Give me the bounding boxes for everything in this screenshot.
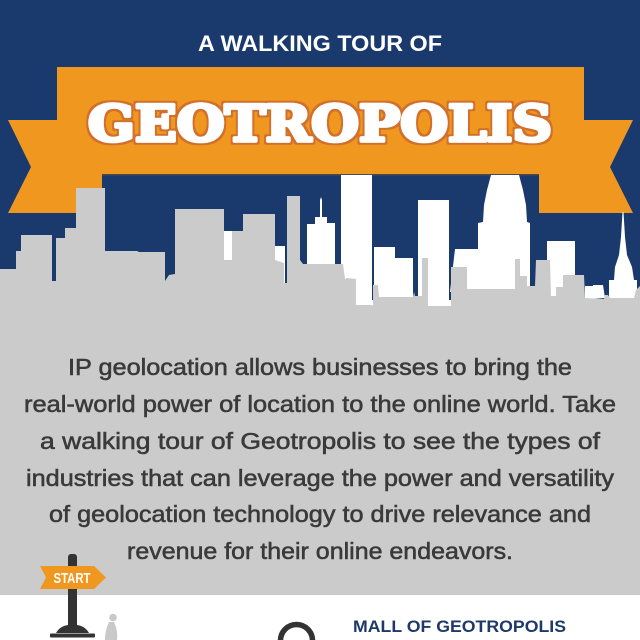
intro paragraph	[24, 354, 616, 564]
intro paragraph: of geolocation technology to drive relevance and	[49, 501, 591, 527]
title: a walking tour of: A WALKING TOUR OF	[198, 31, 442, 56]
icon: mall ring	[280, 624, 312, 640]
icon: start signpost	[40, 554, 106, 638]
icon: walking figure	[105, 614, 117, 640]
background: navy sky	[0, 0, 640, 300]
intro paragraph: real-world power of location to the online world. Take	[24, 391, 616, 417]
sign label: start: START	[54, 570, 90, 587]
intro paragraph: industries that can leverage the power and versatility	[26, 465, 615, 491]
intro paragraph: revenue for their online endeavors.	[127, 538, 513, 564]
intro paragraph: a walking tour of Geotropolis to see the types of	[40, 428, 601, 454]
heading: mall of geotropolis: MALL OF GEOTROPOLIS	[353, 617, 566, 636]
skyline: grey foreground buildings and ground	[0, 188, 640, 595]
intro paragraph: IP geolocation allows businesses to bring the	[68, 354, 572, 380]
banner heading: geotropolis: GEOTROPOLIS	[88, 94, 552, 153]
banner: orange ribbon	[8, 67, 633, 213]
skyline: white background buildings	[224, 175, 637, 306]
